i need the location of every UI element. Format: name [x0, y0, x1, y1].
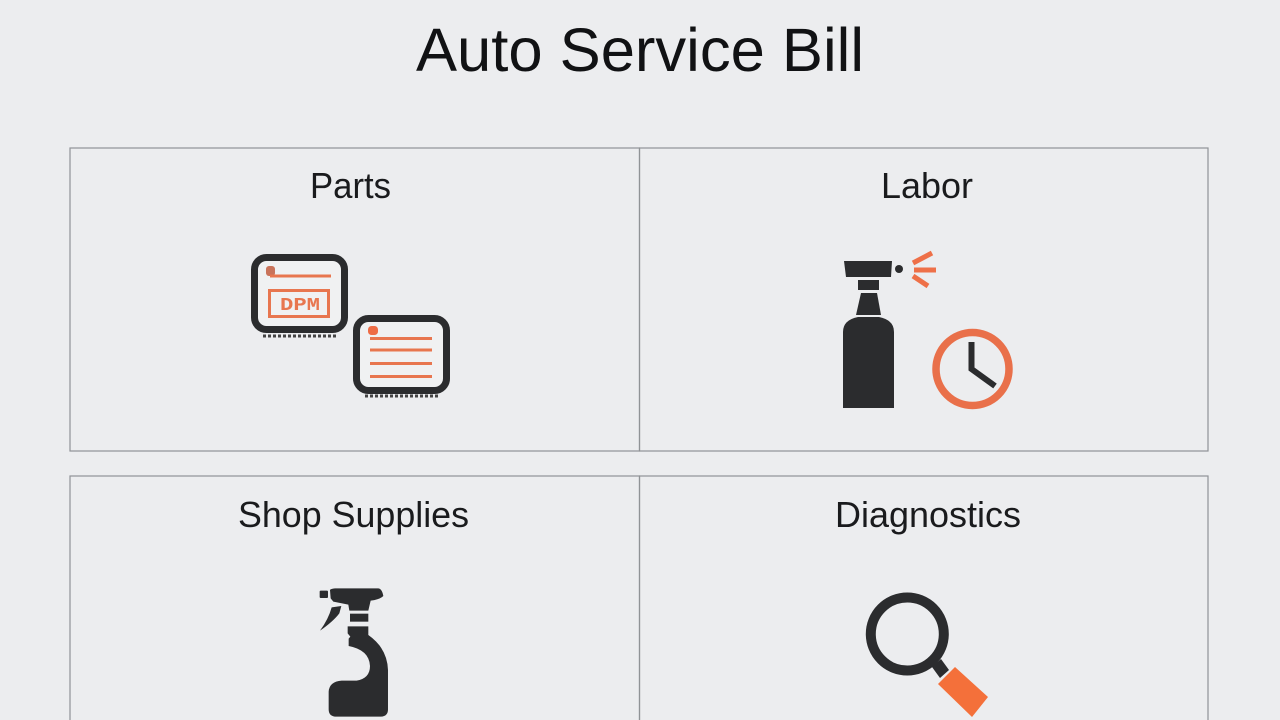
- icon: invoices: [254, 258, 446, 396]
- title: Auto Service Bill: [416, 16, 864, 84]
- icon: spray bottle and clock: [843, 253, 1009, 408]
- icon: trigger spray bottle: [320, 588, 388, 717]
- heading: diagnostics: Diagnostics: [835, 494, 1021, 535]
- heading: shop supplies: Shop Supplies: [238, 494, 469, 535]
- heading: labor: Labor: [881, 165, 973, 206]
- icon: invoices: DPM: [280, 296, 320, 316]
- icon: magnifying glass: [871, 598, 988, 717]
- heading: parts: Parts: [310, 165, 391, 206]
- panel: labor: [640, 148, 1208, 451]
- panel: parts: [70, 148, 640, 451]
- panel: diagnostics: [640, 476, 1208, 720]
- panel: shop supplies: [70, 476, 640, 720]
